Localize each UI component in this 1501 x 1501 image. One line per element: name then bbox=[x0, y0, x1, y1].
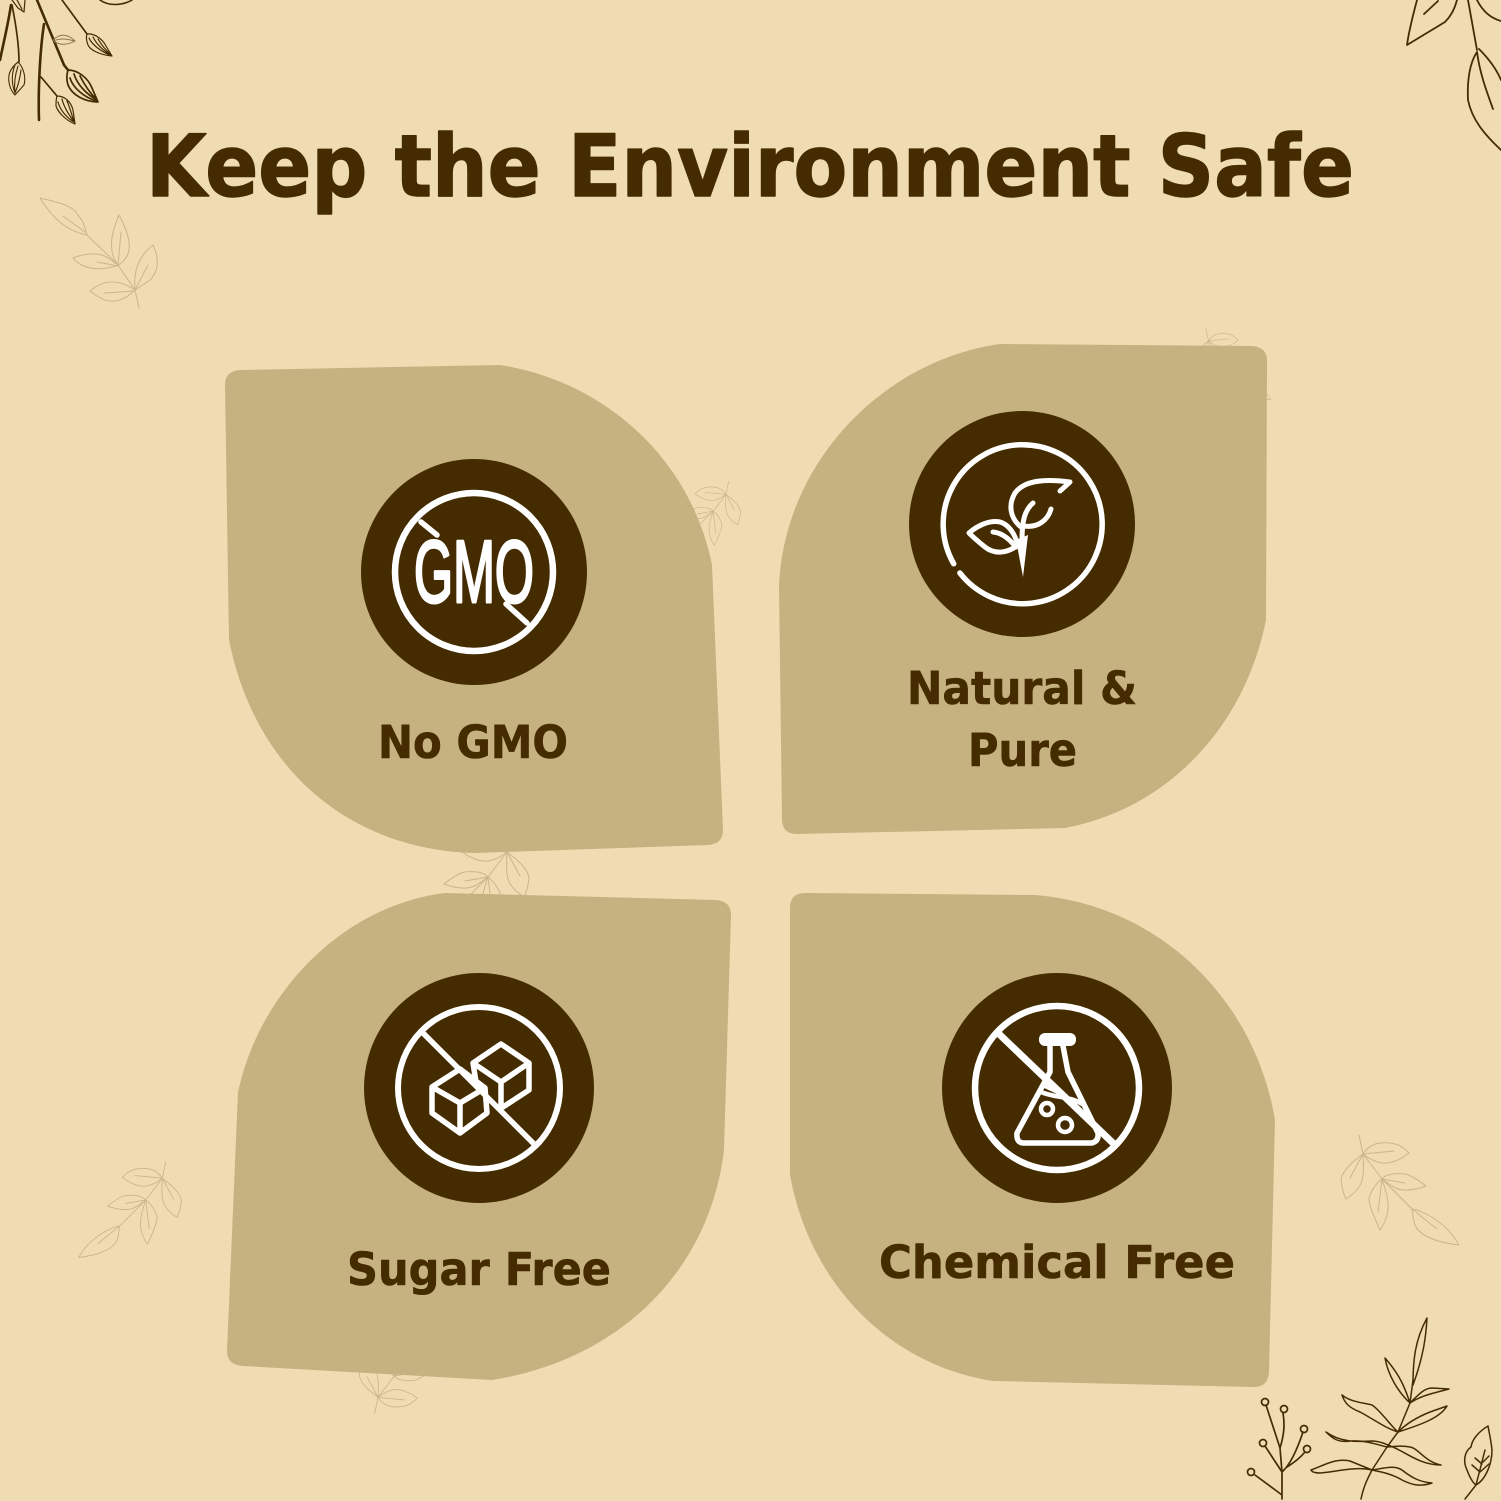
decoration: faint sprig right bbox=[1341, 1135, 1459, 1245]
decoration: bottom-right single leaf bbox=[1465, 1426, 1492, 1499]
decoration: faint sprig above panel 2 bbox=[1194, 328, 1271, 400]
decoration: bottom-right fern bbox=[1311, 1318, 1449, 1499]
panel shape bbox=[225, 365, 723, 853]
panel shape bbox=[790, 893, 1275, 1387]
decoration: top-right leaves bbox=[1407, 0, 1501, 150]
label: No GMO: No GMO bbox=[378, 716, 568, 769]
label: Chemical Free: Chemical Free bbox=[879, 1236, 1235, 1289]
panel: Chemical Free bbox=[790, 893, 1275, 1387]
decoration: faint sprig between panels 1 and 3 bbox=[411, 833, 529, 943]
icon: no GMO: GMO bbox=[414, 522, 534, 621]
icon: natural plant bbox=[909, 411, 1135, 637]
icon: no sugar cubes bbox=[364, 973, 594, 1203]
label: Natural & Pure bbox=[907, 662, 1137, 777]
decoration: faint sprig beside panel 1 bbox=[662, 482, 741, 555]
panel: Sugar Free bbox=[227, 893, 731, 1380]
icon: no chemical flask bbox=[942, 973, 1172, 1203]
panel: Natural & Pure bbox=[779, 344, 1267, 834]
panel shape bbox=[227, 893, 731, 1380]
decoration: faint sprig below panel 3 bbox=[359, 1320, 460, 1414]
decoration: bottom-right budding plant bbox=[1248, 1398, 1310, 1499]
label: Natural & Pure: Pure bbox=[968, 724, 1077, 777]
panel: No GMO bbox=[225, 365, 723, 853]
title: Keep the Environment Safe bbox=[146, 117, 1354, 217]
decoration: faint sprig under title bbox=[40, 198, 157, 308]
panel shape bbox=[779, 344, 1267, 834]
label: Natural & Pure: Natural & bbox=[907, 662, 1137, 715]
decoration: top-left branch with pods bbox=[0, 0, 132, 124]
icon: no GMO bbox=[361, 459, 587, 685]
label: Sugar Free: Sugar Free bbox=[347, 1243, 611, 1296]
decoration: faint sprig bottom-left bbox=[79, 1162, 181, 1257]
